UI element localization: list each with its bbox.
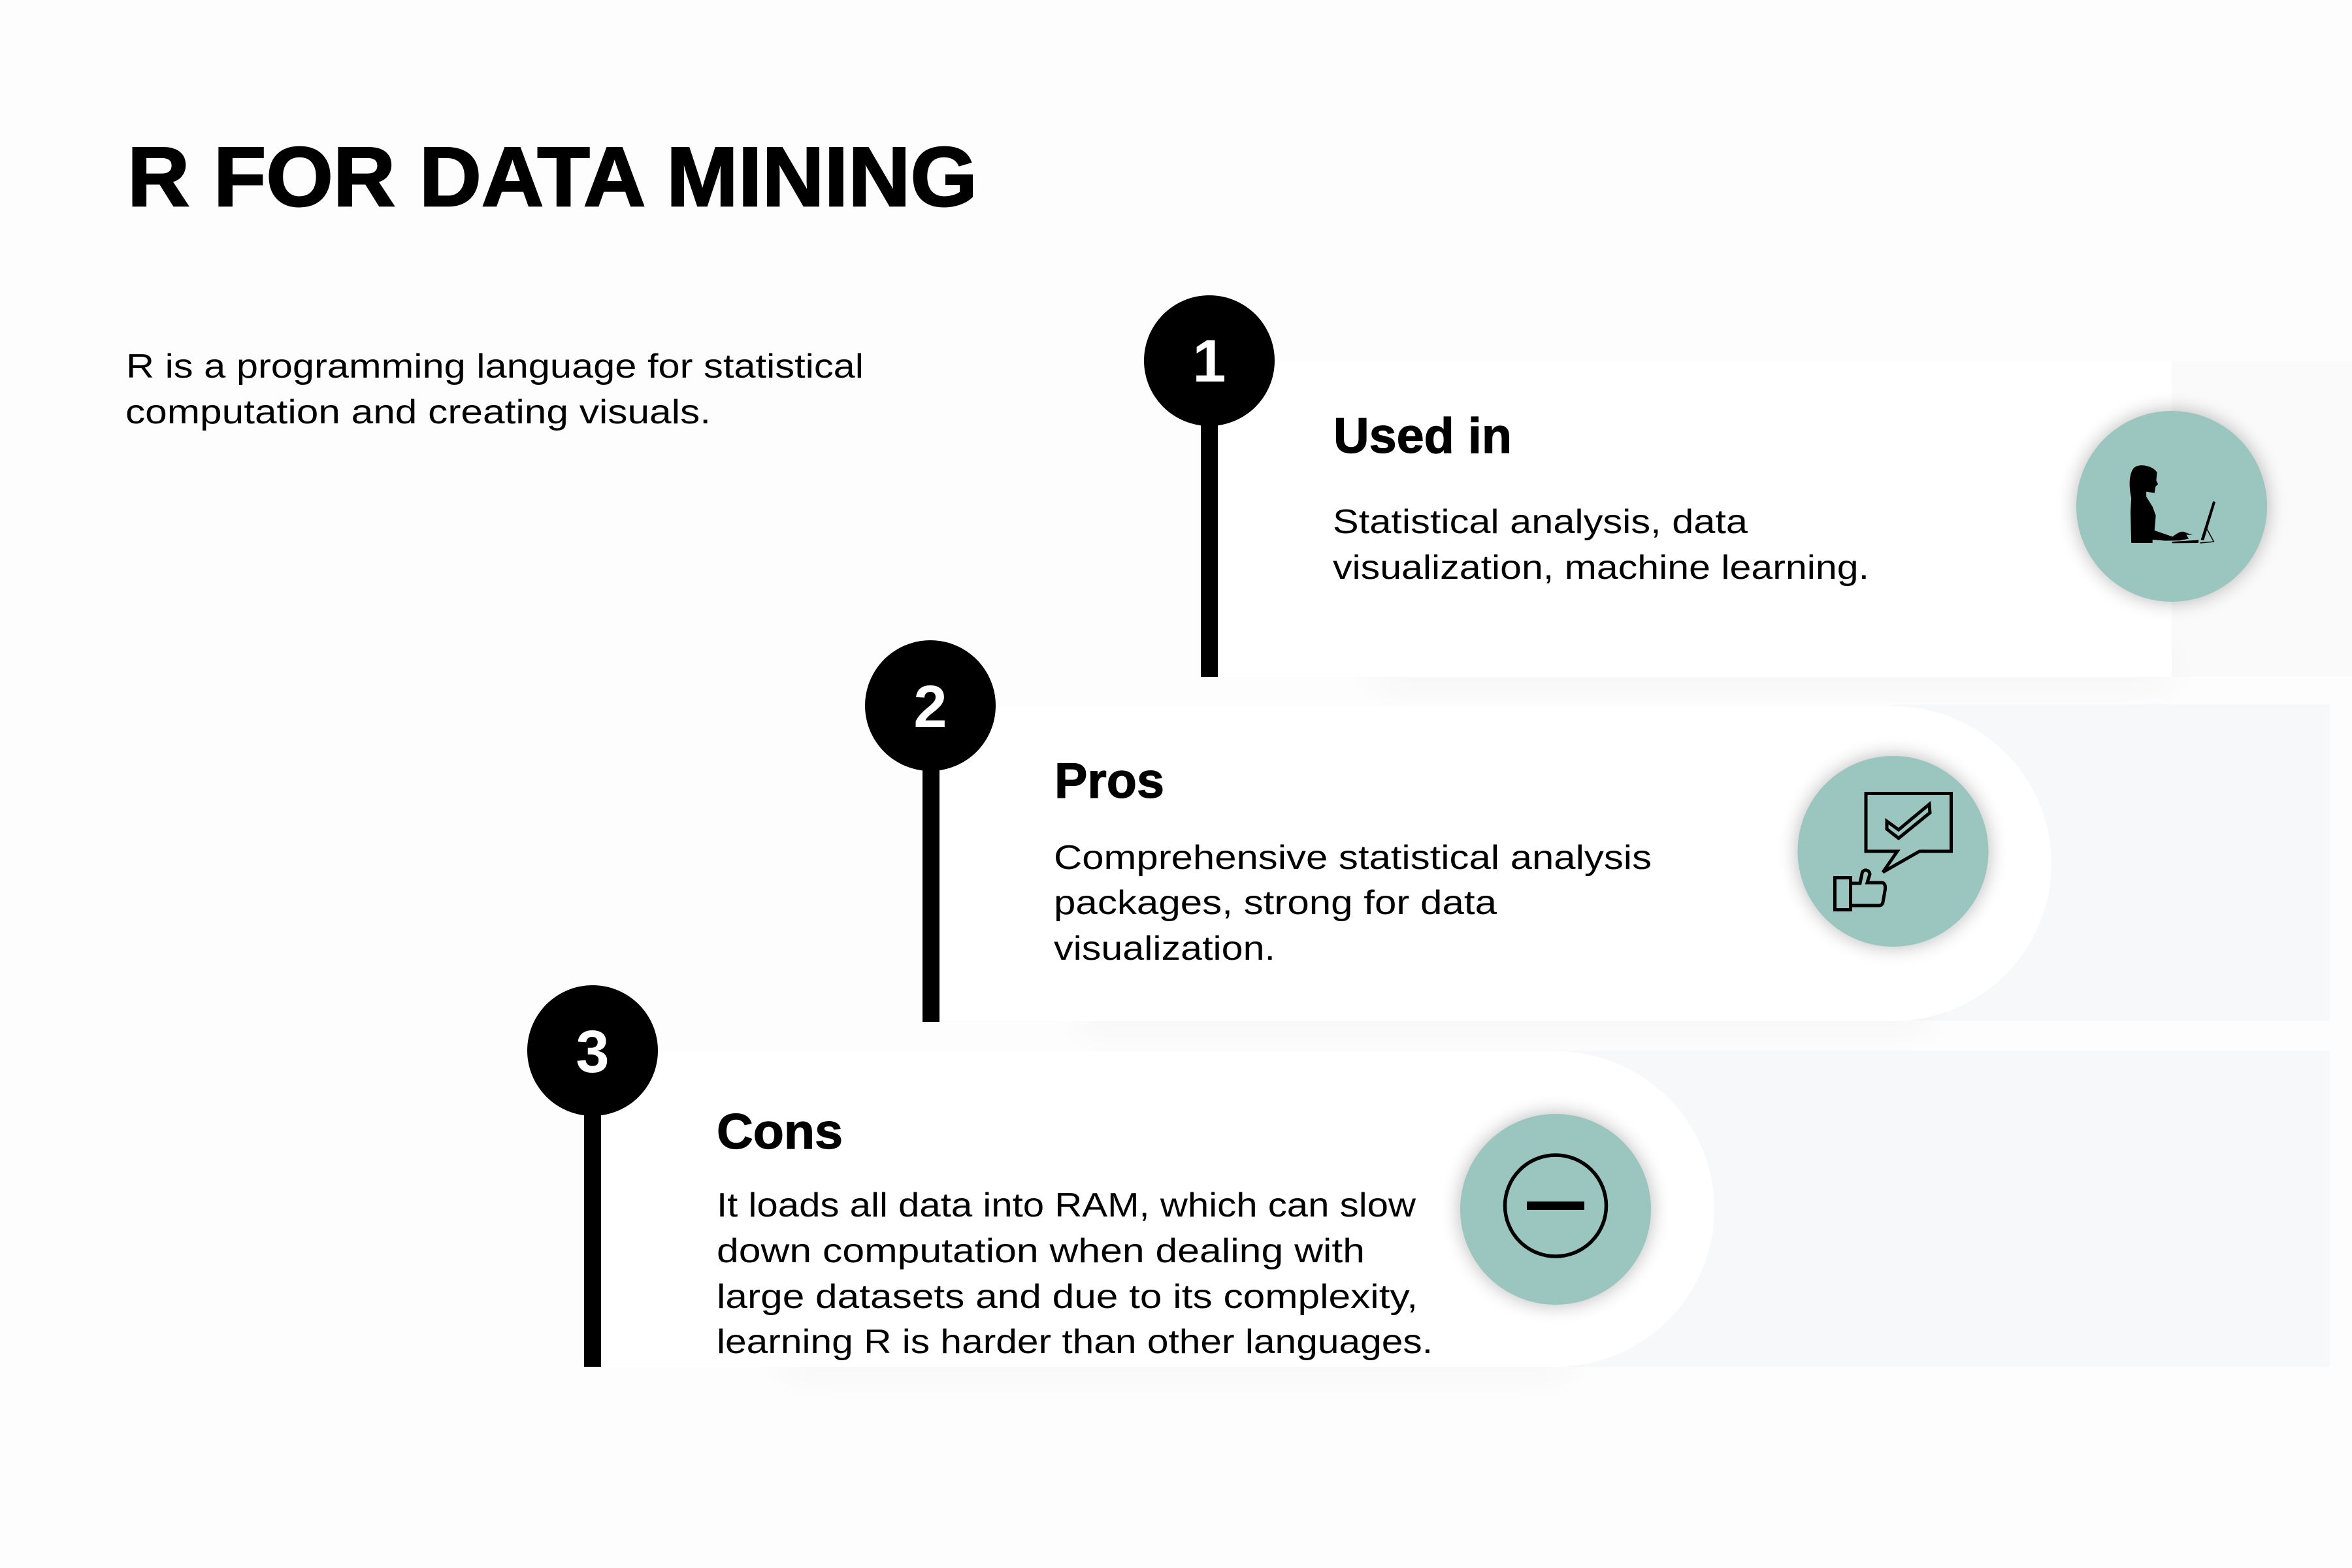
text: used in: [1333, 503, 1869, 587]
pin 2: 2: [913, 674, 947, 740]
text: cons: down computation when dealing with: [717, 1232, 1365, 1270]
text: cons: large datasets and due to its complexity,: [717, 1278, 1418, 1316]
title: R FOR DATA MINING: [127, 130, 977, 224]
intro text: R is a programming language for statistical: [126, 348, 864, 385]
text: used in: Statistical analysis, data: [1333, 503, 1748, 541]
icon: minus in circle: [1460, 1114, 1651, 1305]
pin 1: [1144, 295, 1275, 677]
pin 2: [865, 640, 996, 1022]
text: cons: It loads all data into RAM, which can slow: [717, 1186, 1416, 1224]
text: pros: Comprehensive statistical analysis: [1054, 839, 1652, 877]
panel: pros: [865, 640, 2330, 1029]
text: cons: learning R is harder than other languages.: [717, 1323, 1433, 1361]
pin 3: 3: [576, 1019, 610, 1085]
text: used in: visualization, machine learning.: [1333, 549, 1869, 587]
heading: cons: Cons: [717, 1104, 843, 1160]
intro text: [125, 348, 864, 431]
text: pros: [1054, 839, 1652, 968]
text: pros: visualization.: [1054, 930, 1275, 968]
icon: person at laptop: [2076, 411, 2267, 602]
heading: pros: Pros: [1054, 753, 1164, 809]
pin 1: 1: [1192, 328, 1226, 395]
text: cons: [717, 1186, 1433, 1361]
icon: speech bubble with check and thumbs up: [1798, 756, 1989, 947]
text: pros: packages, strong for data: [1054, 884, 1497, 922]
intro text: computation and creating visuals.: [125, 393, 711, 431]
pin 3: [527, 985, 658, 1367]
panel: used in: [1144, 295, 2352, 686]
panel: cons: [527, 985, 2330, 1375]
heading: used in: Used in: [1333, 408, 1512, 464]
